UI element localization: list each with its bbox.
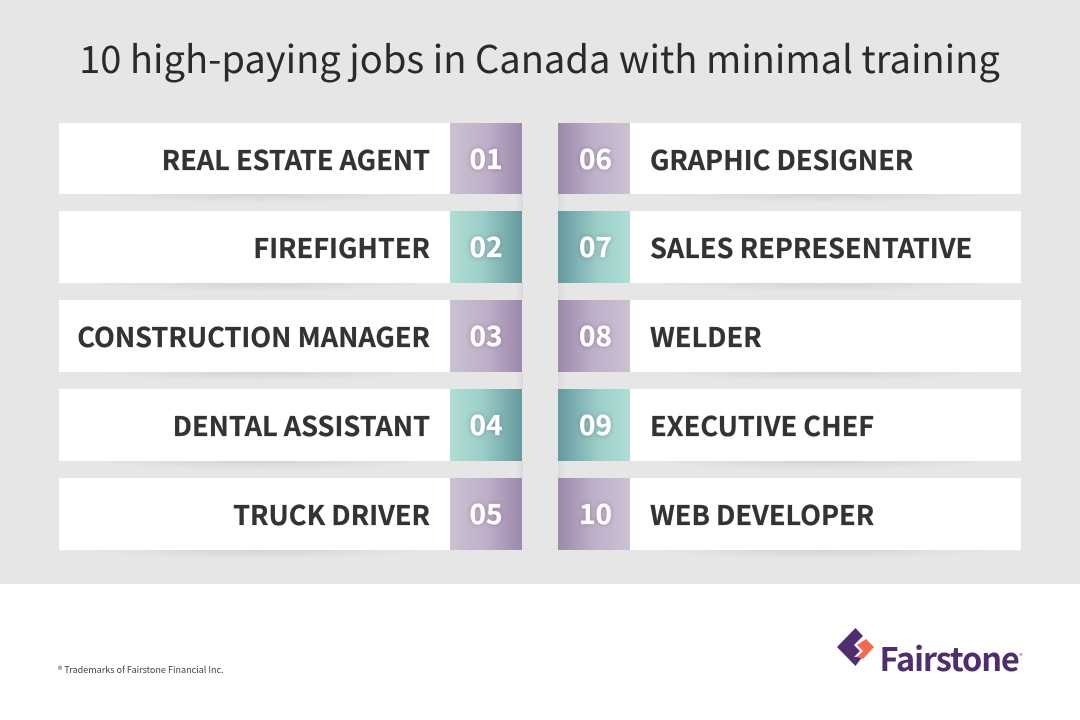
- number badge 07: 07: [579, 226, 612, 266]
- row 02: firefighter: [59, 211, 523, 300]
- number badge 03: [450, 300, 522, 372]
- number badge 04: 04: [469, 404, 503, 444]
- number badge 09: 09: [579, 404, 612, 444]
- icon: Fairstone diamond logo: [837, 628, 874, 666]
- job label 03: CONSTRUCTION MANAGER: [77, 316, 430, 355]
- row 04: dental assistant: [59, 389, 523, 478]
- number badge 03: 03: [469, 315, 503, 355]
- row 05: truck driver: [59, 478, 522, 555]
- number badge 04: [450, 389, 522, 461]
- number badge 01: [450, 122, 522, 194]
- title: 10 high-paying jobs in Canada with minimal training: [79, 29, 1000, 84]
- row 01: real estate agent: [59, 123, 523, 212]
- Fairstone wordmark: Fairstone®: [880, 634, 1023, 681]
- number badge 05: [450, 478, 522, 550]
- row 07: sales representative: [558, 211, 1021, 300]
- number badge 06: 06: [579, 138, 612, 178]
- number badge 10: 10: [579, 493, 612, 533]
- job label 06: GRAPHIC DESIGNER: [650, 138, 913, 178]
- job label 05: TRUCK DRIVER: [233, 494, 430, 533]
- number badge 06: [558, 122, 630, 194]
- number badge 09: [558, 389, 630, 461]
- number badge 07: [558, 211, 630, 283]
- number badge 05: 05: [469, 493, 503, 533]
- row 10: web developer: [558, 478, 1021, 555]
- number badge 10: [558, 478, 630, 550]
- job label 09: EXECUTIVE CHEF: [650, 405, 874, 444]
- row 03: construction manager: [59, 300, 523, 389]
- job label 01: REAL ESTATE AGENT: [162, 138, 430, 178]
- number badge 08: 08: [579, 315, 612, 355]
- row 06: graphic designer: [558, 123, 1021, 211]
- job label 10: WEB DEVELOPER: [650, 494, 874, 533]
- trademark footnote: ® Trademarks of Fairstone Financial Inc.: [58, 663, 224, 676]
- number badge 02: [450, 211, 522, 283]
- job label 04: DENTAL ASSISTANT: [173, 405, 430, 444]
- row 08: welder: [558, 300, 1021, 389]
- job label 08: WELDER: [650, 316, 762, 355]
- row 09: executive chef: [558, 389, 1021, 478]
- job label 02: FIREFIGHTER: [253, 227, 430, 266]
- number badge 08: [558, 300, 630, 372]
- number badge 02: 02: [469, 226, 503, 266]
- number badge 01: 01: [469, 138, 503, 178]
- job label 07: SALES REPRESENTATIVE: [650, 227, 972, 266]
